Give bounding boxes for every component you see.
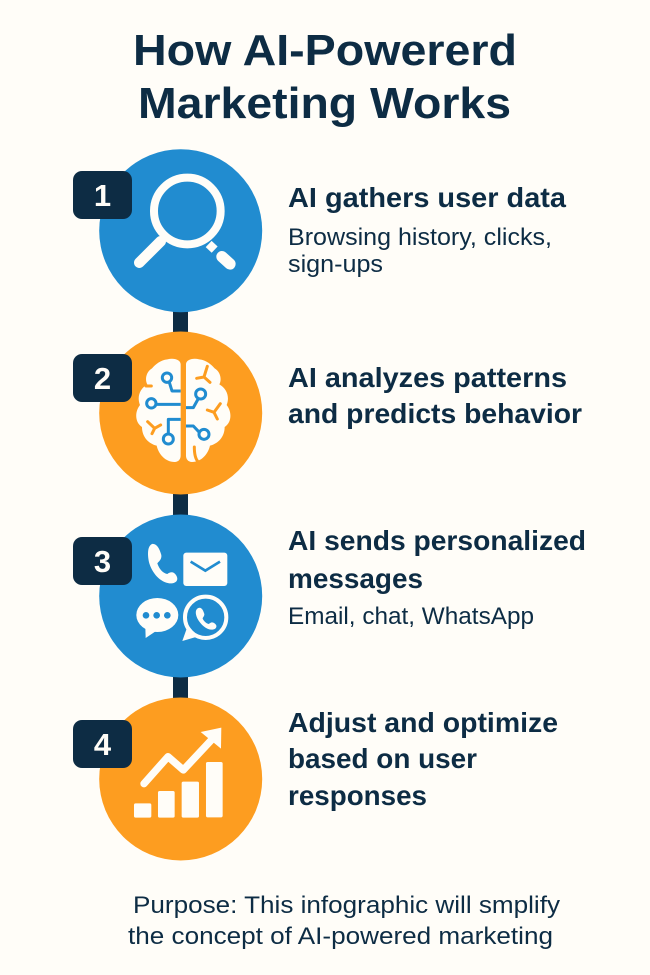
step 4 heading [288, 707, 558, 811]
step 4 heading: Adjust and optimize [288, 707, 558, 738]
step 4 badge: 4 [94, 727, 112, 762]
icon: phone, email, chat, WhatsApp [136, 544, 227, 641]
step 4 badge [73, 720, 132, 768]
title [133, 26, 517, 128]
step 3 heading [288, 525, 586, 594]
step 3 badge: 3 [94, 544, 111, 579]
step 1 badge [73, 171, 132, 219]
step 1 badge: 1 [94, 178, 111, 213]
step 2 heading: AI analyzes patterns [288, 362, 567, 393]
step 1 description [288, 224, 552, 278]
purpose note: the concept of AI-powered marketing [128, 923, 553, 950]
icon: brain with circuits [136, 359, 230, 462]
envelope [183, 553, 227, 586]
step 4 circle [99, 698, 262, 860]
icon: growth chart with arrow [134, 728, 223, 818]
step 1 description: sign-ups [288, 251, 383, 278]
step 3 circle [99, 514, 262, 678]
step 4 [73, 698, 558, 860]
purpose note: Purpose: This infographic will smplify [133, 892, 560, 919]
step 1 description: Browsing history, clicks, [288, 224, 552, 251]
step 3 heading: AI sends personalized [288, 525, 586, 556]
title: Marketing Works [138, 79, 511, 128]
title: How AI-Powererd [133, 26, 517, 75]
step 2 badge [73, 354, 132, 402]
step 1 circle [99, 149, 262, 312]
icon: magnifying glass [139, 178, 230, 264]
step 2 circle [99, 332, 262, 494]
step 2 heading [288, 362, 582, 429]
purpose note [128, 892, 560, 950]
step 2 [73, 332, 582, 494]
chat bubble [136, 598, 178, 632]
step 3 description: Email, chat, WhatsApp [288, 603, 534, 630]
step 3 heading: messages [288, 563, 423, 594]
phone [148, 544, 177, 583]
step 1 [73, 149, 566, 312]
step 2 badge: 2 [94, 361, 111, 396]
step 4 heading: responses [288, 780, 427, 811]
step 3 badge [73, 537, 132, 585]
WhatsApp [185, 597, 226, 638]
step 4 heading: based on user [288, 743, 477, 774]
timeline connector [173, 300, 188, 720]
step 2 heading: and predicts behavior [288, 398, 582, 429]
step 3 [73, 514, 586, 678]
step 1 heading: AI gathers user data [288, 182, 566, 213]
